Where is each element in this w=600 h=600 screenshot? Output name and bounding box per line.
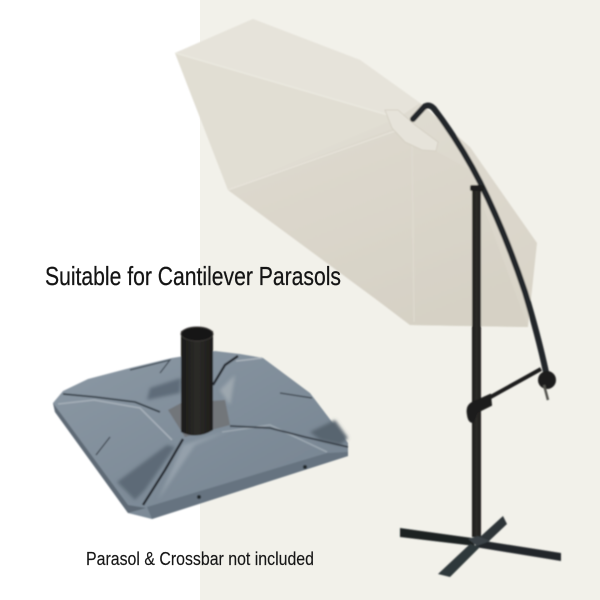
crank handle — [544, 385, 548, 400]
slots — [143, 439, 183, 505]
edge highlights — [58, 400, 172, 440]
surface marks — [96, 437, 110, 455]
bolt holes — [197, 495, 201, 499]
bevel shadows — [117, 375, 348, 500]
black post — [181, 331, 213, 436]
background panel: cream — [200, 0, 600, 600]
pole joint — [470, 185, 484, 191]
base slab — [53, 351, 348, 519]
centre recess — [168, 400, 230, 437]
clamp — [468, 395, 491, 422]
cantilever arm — [413, 106, 546, 372]
left side edge — [53, 403, 146, 513]
front side edge — [147, 452, 348, 519]
heading text: Suitable for Cantilever Parasols — [45, 261, 341, 291]
vertical pole — [472, 187, 481, 537]
parasol — [175, 19, 561, 577]
caption text: Parasol & Crossbar not included — [86, 548, 314, 569]
crank ball — [538, 371, 556, 389]
cross base — [400, 516, 561, 577]
concrete parasol base — [53, 327, 348, 519]
parasol canopy — [175, 19, 537, 327]
post opening — [181, 327, 213, 341]
support strut — [487, 369, 541, 399]
